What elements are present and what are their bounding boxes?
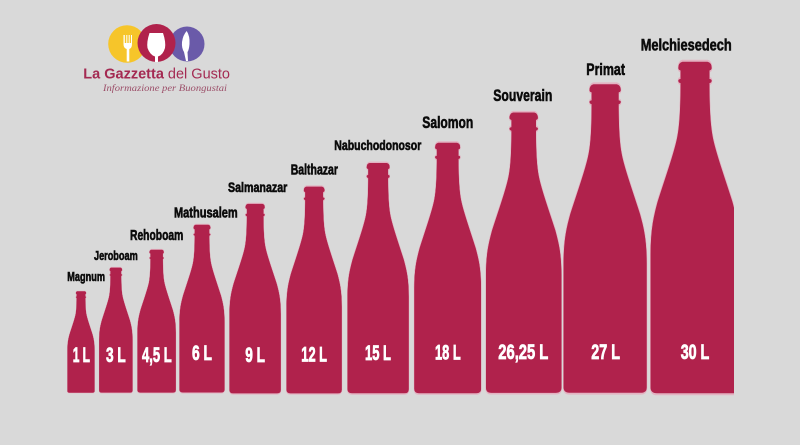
bottle: Nabuchodonosor: Nabuchodonosor <box>334 137 422 153</box>
bottle: Salmanazar: Salmanazar <box>228 179 288 195</box>
bottle: Balthazar <box>286 163 342 394</box>
bottle: Salmanazar <box>228 179 288 394</box>
bottle: Nabuchodonosor: 15 L <box>365 342 391 365</box>
bottle: Mathusalem: Mathusalem <box>174 205 238 221</box>
bottle: Melchiesedech <box>641 36 740 394</box>
bottle: Souverain <box>486 86 562 394</box>
bottle: Primat <box>563 60 647 394</box>
bottle: Salomon: 18 L <box>435 341 461 364</box>
bottle: Jeroboam: 3 L <box>106 344 126 367</box>
bottle: Magnum: 1 L <box>73 344 90 367</box>
bottle: Mathusalem <box>174 205 238 393</box>
bottle: Rehoboam <box>130 228 183 393</box>
icon: purple circle with knife <box>170 26 204 62</box>
bottle: Jeroboam: Jeroboam <box>94 248 138 263</box>
bottle: Primat: 27 L <box>591 341 620 364</box>
bottle: Salomon <box>414 113 481 394</box>
bottle: Rehoboam: 4,5 L <box>142 344 172 367</box>
bottle: Magnum: Magnum <box>67 269 105 284</box>
bottle: Jeroboam <box>94 248 138 393</box>
logo: La Gazzetta del Gusto <box>83 24 230 94</box>
bottle: Rehoboam: Rehoboam <box>130 228 183 244</box>
bottle: Souverain: 26,25 L <box>498 341 548 364</box>
bottle: Nabuchodonosor <box>334 137 422 394</box>
bottle: Primat: Primat <box>586 60 625 79</box>
bottle: Melchiesedech: 30 L <box>681 341 709 364</box>
bottle: Salomon: Salomon <box>422 113 473 132</box>
icon: yellow circle with fork <box>108 25 146 63</box>
bottle: Salmanazar: 9 L <box>245 344 265 367</box>
icon: red circle with wine glass <box>138 24 176 62</box>
bottle chart <box>67 36 740 394</box>
bottle: Melchiesedech: Melchiesedech <box>641 36 732 55</box>
bottle: Balthazar: 12 L <box>301 344 327 367</box>
bottle: Balthazar: Balthazar <box>291 163 338 179</box>
logo tagline: Informazione per Buongustai <box>102 83 227 94</box>
bottle: Mathusalem: 6 L <box>192 342 212 365</box>
bottle: Magnum <box>67 269 105 393</box>
bottle: Souverain: Souverain <box>493 86 552 105</box>
logo wordmark: La Gazzetta del Gusto <box>83 66 230 82</box>
